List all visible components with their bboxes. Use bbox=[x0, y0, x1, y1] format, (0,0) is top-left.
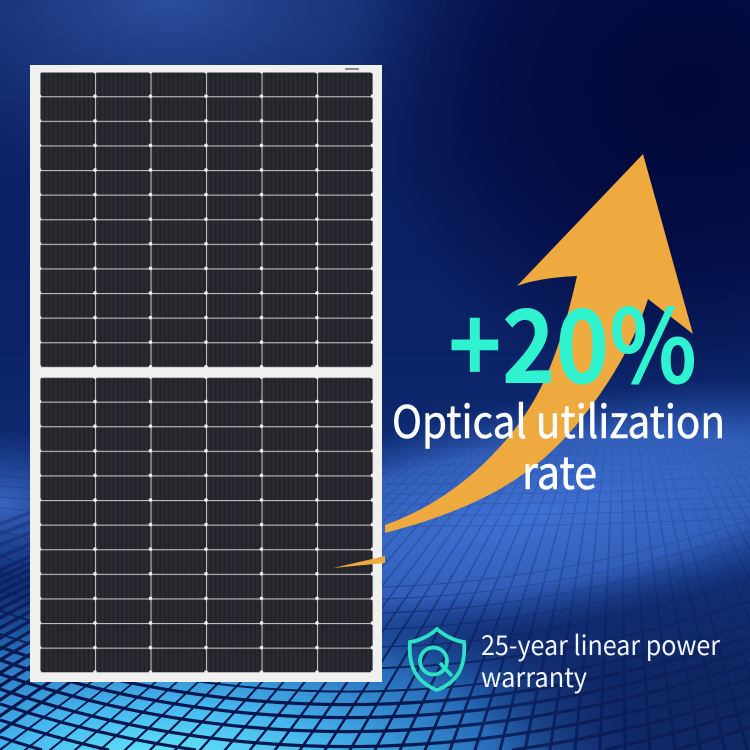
caption: optical utilization rate: rate bbox=[522, 437, 597, 502]
icon: Q shield bbox=[410, 629, 464, 690]
caption: optical utilization rate bbox=[392, 386, 725, 502]
+20% headline: +20% bbox=[448, 266, 697, 413]
lower half cell grid bbox=[40, 377, 373, 672]
upper half cell grid bbox=[40, 72, 373, 368]
warranty text: warranty bbox=[481, 656, 587, 695]
warranty text: 25-year linear power bbox=[481, 624, 720, 663]
panel frame bbox=[30, 65, 382, 682]
panel nameplate mark bbox=[345, 68, 359, 70]
solar panel bbox=[30, 65, 382, 682]
orange growth arrow bbox=[333, 154, 693, 568]
warranty text bbox=[481, 624, 720, 695]
